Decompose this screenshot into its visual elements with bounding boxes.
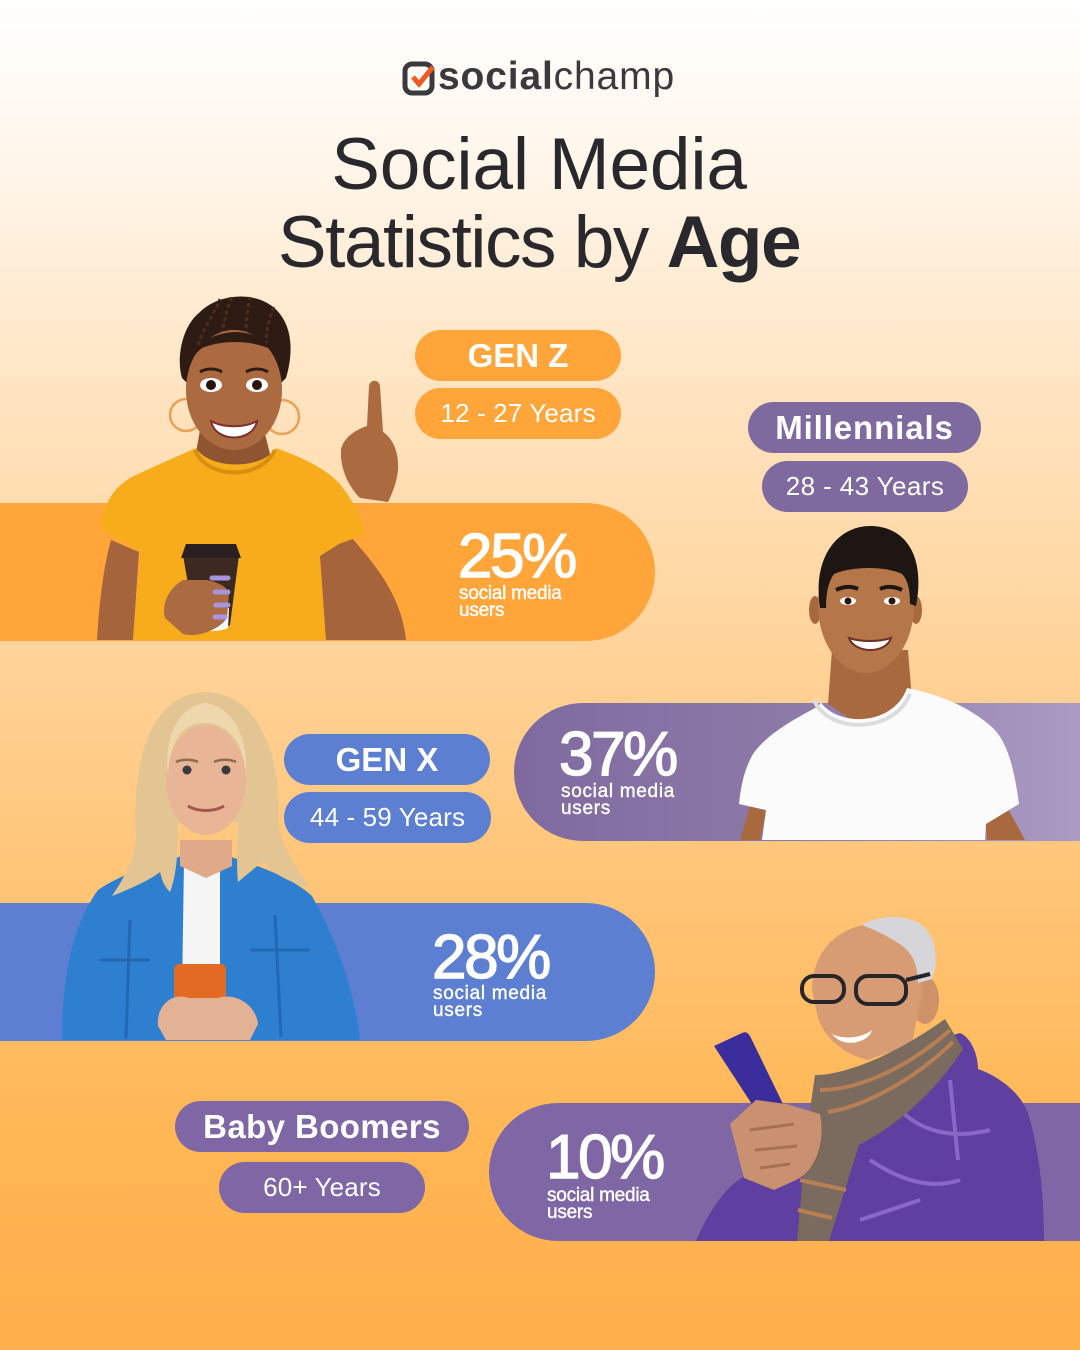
title: Social Media <box>331 124 747 205</box>
label: GEN Z <box>415 330 621 381</box>
icon: check badge <box>402 62 435 96</box>
label: 60+ Years <box>219 1162 425 1213</box>
illustration: young man in white t-shirt <box>739 526 1025 840</box>
label: GEN Z: GEN Z <box>468 336 568 374</box>
label: Millennials <box>748 402 981 453</box>
title: Statistics by Age <box>278 202 800 283</box>
caption <box>561 781 675 819</box>
stat: 25%: 25% <box>458 522 575 591</box>
label: GEN X <box>284 734 490 785</box>
label: 60+ Years: 60+ Years <box>263 1172 381 1202</box>
illustration: young woman with coffee <box>97 296 406 640</box>
label: GEN X: GEN X <box>336 740 438 778</box>
caption: social media <box>433 983 547 1004</box>
caption: social media <box>547 1185 650 1206</box>
caption: users <box>433 1000 483 1021</box>
band: Gen Z <box>0 503 655 641</box>
illustration: older woman in blue shirt <box>62 692 360 1040</box>
title <box>278 124 800 283</box>
band: Gen X <box>0 903 655 1041</box>
label: Baby Boomers <box>175 1101 469 1152</box>
panel: Millennials <box>514 402 1080 841</box>
band: Millennials <box>514 703 1080 841</box>
label: 12 - 27 Years <box>415 388 621 439</box>
stat: 28%: 28% <box>432 923 549 992</box>
stat: 37%: 37% <box>559 720 676 789</box>
label: 44 - 59 Years <box>284 792 491 843</box>
logo <box>402 55 675 98</box>
label: Millennials: Millennials <box>775 408 954 446</box>
caption: users <box>561 798 611 819</box>
caption: users <box>547 1202 592 1223</box>
caption: social media <box>561 781 675 802</box>
caption <box>459 583 562 621</box>
panel: Gen X <box>0 692 655 1041</box>
caption: users <box>459 600 504 621</box>
stat: 10%: 10% <box>546 1123 663 1192</box>
illustration: older man with phone <box>696 917 1044 1241</box>
band: Baby Boomers <box>489 1103 1080 1241</box>
label: 12 - 27 Years: 12 - 27 Years <box>440 398 596 428</box>
panel: Gen Z <box>0 296 655 641</box>
label: 28 - 43 Years: 28 - 43 Years <box>786 471 944 501</box>
caption <box>433 983 547 1021</box>
logo wordmark: socialchamp <box>438 55 675 98</box>
label: 28 - 43 Years <box>762 461 968 512</box>
caption <box>547 1185 650 1223</box>
panel: Baby Boomers <box>175 917 1080 1241</box>
label: Baby Boomers: Baby Boomers <box>203 1108 441 1144</box>
caption: social media <box>459 583 562 604</box>
label: 44 - 59 Years: 44 - 59 Years <box>310 802 465 832</box>
